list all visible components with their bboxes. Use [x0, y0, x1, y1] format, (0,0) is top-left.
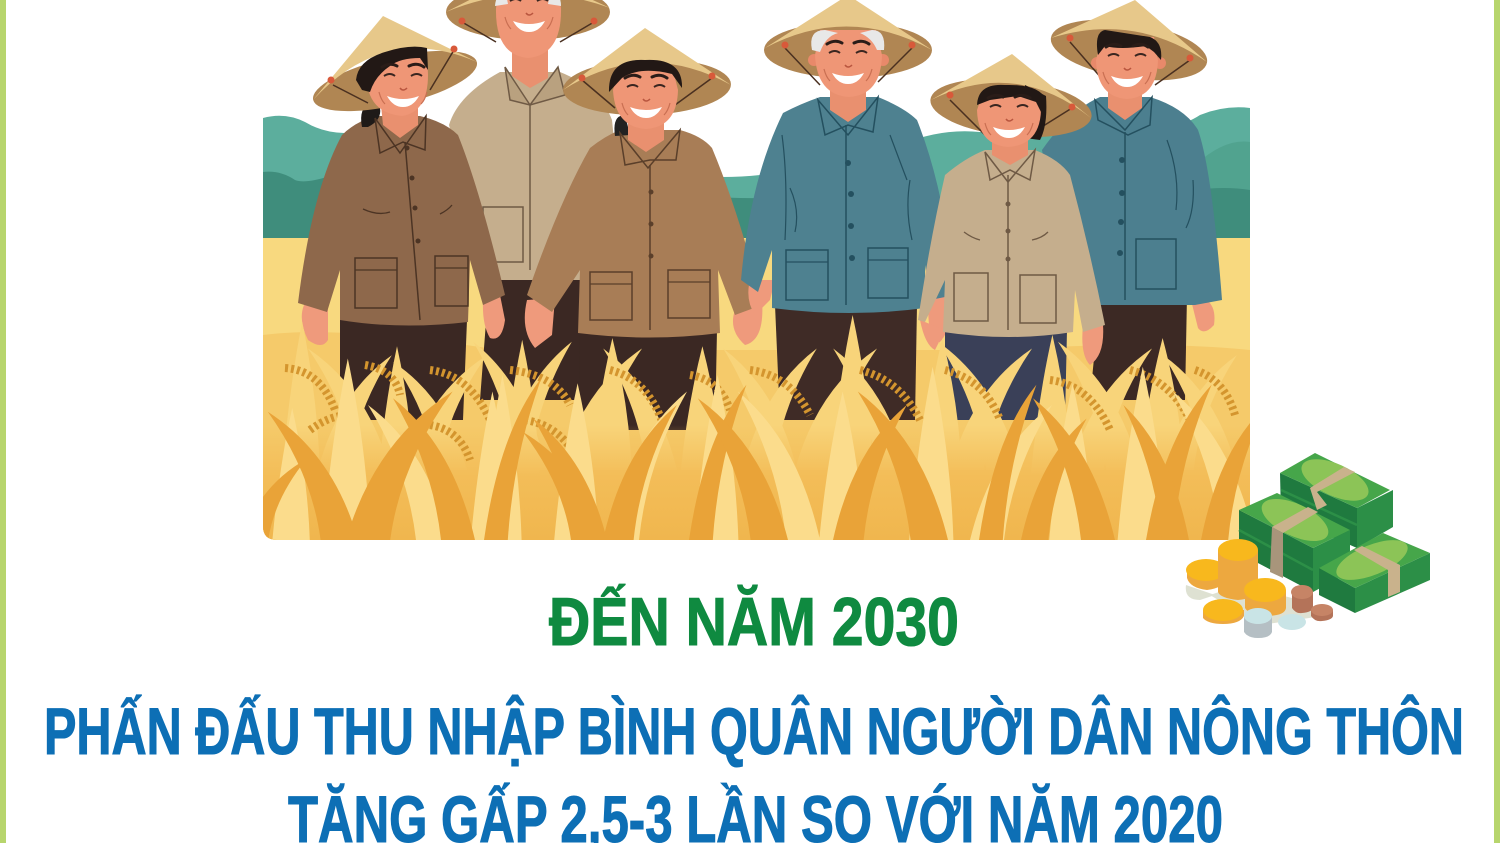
- farmer: man on right, blue shirt: [1042, 0, 1222, 400]
- heading: year: ĐẾN NĂM 2030: [549, 583, 959, 660]
- front rice leaves light: [272, 358, 1255, 540]
- rice plants: [241, 315, 1267, 540]
- money stack front: [1319, 532, 1430, 613]
- coin shadow: [1186, 585, 1330, 625]
- illustration: farmers in rice field: [241, 0, 1267, 540]
- silver and copper coins: [1244, 585, 1333, 638]
- money stack middle: [1239, 490, 1350, 592]
- gold coins: [1186, 539, 1286, 624]
- farmer: elderly man in back, tan shirt: [446, 0, 615, 400]
- background landscape: [263, 107, 1250, 540]
- money stack top: [1280, 451, 1393, 548]
- farmer: woman in centre, brown shirt: [525, 28, 762, 430]
- farmer: woman on right, tan shirt: [918, 54, 1105, 420]
- icon: money and coins: [1186, 451, 1430, 638]
- rice mid band: [263, 425, 1250, 540]
- rice ears: [285, 365, 1235, 460]
- farmer: elderly man in centre, blue shirt: [741, 0, 955, 420]
- front rice leaves orange: [241, 378, 1267, 540]
- left border: [0, 0, 6, 843]
- back rice leaves: [285, 315, 1236, 450]
- farmer: woman on left, brown shirt: [298, 16, 505, 420]
- right border: [1494, 0, 1500, 843]
